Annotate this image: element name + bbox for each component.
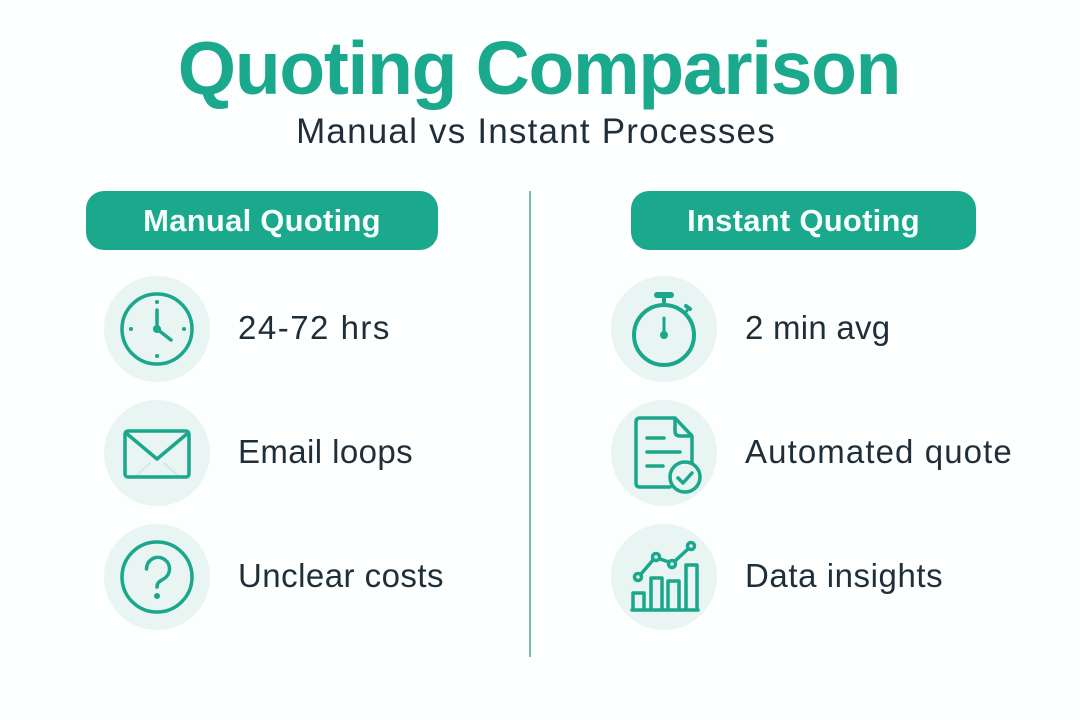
label: 2 min avg: 2 min avg <box>745 309 890 346</box>
label: unclear costs: Unclear costs <box>238 557 444 594</box>
heading: manual quoting <box>86 191 438 250</box>
title: Quoting Comparison <box>178 26 900 110</box>
label: email loops: Email loops <box>238 433 413 470</box>
heading: instant quoting: Instant Quoting <box>687 203 920 238</box>
icon: clock <box>104 276 210 382</box>
icon: envelope <box>104 400 210 506</box>
icon: question mark <box>104 524 210 630</box>
subtitle: Manual vs Instant Processes <box>296 112 776 151</box>
label: 24-72 hrs: 24-72 hrs <box>238 309 391 346</box>
divider <box>529 191 531 657</box>
heading: instant quoting <box>631 191 976 250</box>
icon: document with check <box>611 400 717 506</box>
icon: stopwatch <box>611 276 717 382</box>
label: automated quote: Automated quote <box>745 433 1013 470</box>
label: data insights: Data insights <box>745 557 943 594</box>
heading: manual quoting: Manual Quoting <box>143 203 381 238</box>
icon: bar and line chart <box>611 524 717 630</box>
